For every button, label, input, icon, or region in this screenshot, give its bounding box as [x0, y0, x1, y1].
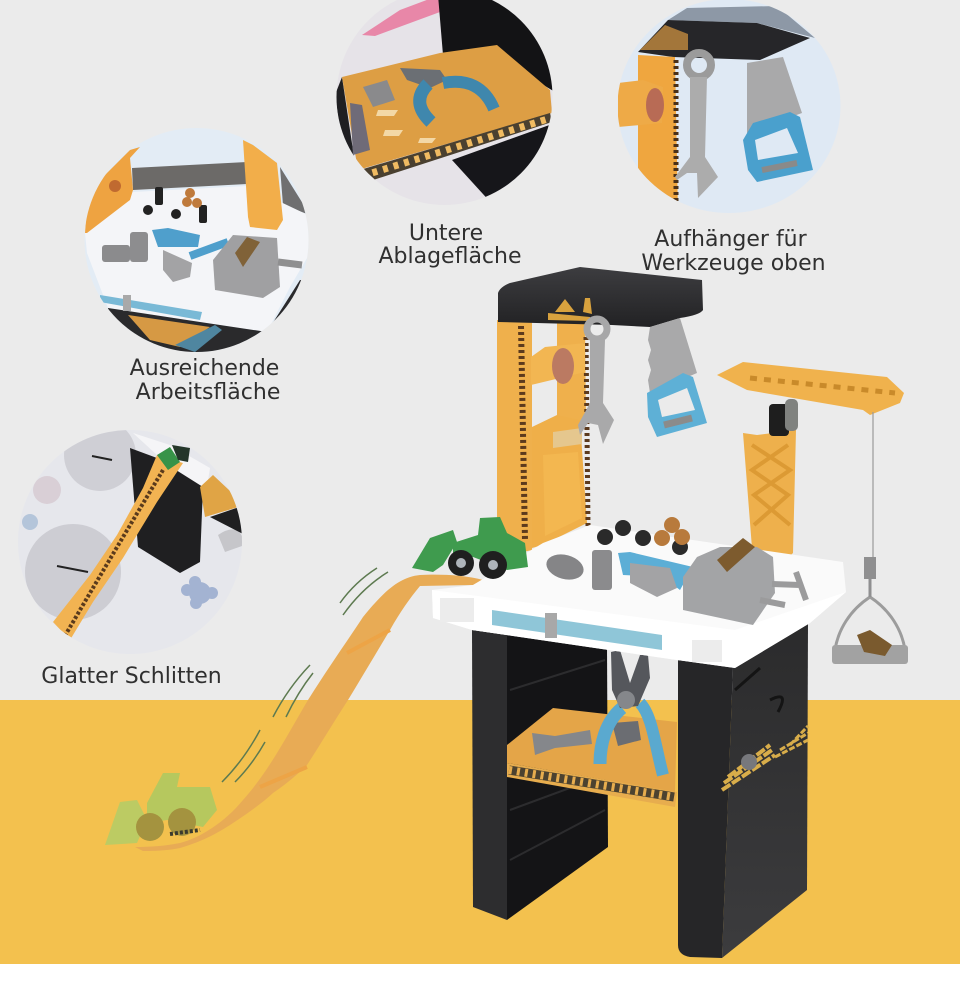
circle: tool hangers [615, 0, 843, 220]
label: Glatter Schlitten: Glatter Schlitten [41, 664, 222, 689]
label: Ausreichende Arbeitsfläche [130, 356, 280, 405]
lower shelf [507, 650, 677, 807]
pulley [769, 399, 798, 436]
label: Aufhänger für Werkzeuge oben [641, 227, 826, 276]
label: Ausreichende Arbeitsfläche: Ausreichende [130, 356, 279, 381]
label: Aufhänger für Werkzeuge oben: Aufhänger für [654, 227, 808, 252]
pliers [600, 650, 663, 775]
circle: work surface [84, 125, 312, 355]
background wall [0, 0, 960, 700]
workbench [412, 267, 908, 958]
hanging wrench [578, 319, 614, 444]
label: Untere Ablagefläche: Untere [409, 221, 483, 246]
roof [498, 267, 703, 327]
motion lines [222, 568, 388, 782]
ramp [135, 575, 483, 851]
bracket with badge [531, 343, 585, 385]
label: Aufhänger für Werkzeuge oben: Werkzeuge oben [641, 251, 826, 276]
table top [432, 525, 846, 668]
background floor [0, 700, 960, 964]
bench legs [472, 623, 808, 958]
crane [717, 362, 908, 664]
label: Untere Ablagefläche [378, 221, 522, 269]
label: Ausreichende Arbeitsfläche: Arbeitsfläche [136, 380, 280, 405]
circle: slide [22, 430, 242, 638]
circle: lower shelf [335, 0, 555, 208]
toy bulldozer [412, 517, 528, 579]
tools on table [544, 517, 806, 625]
label: Untere Ablagefläche: Ablagefläche [378, 244, 522, 269]
hanging saw [647, 318, 707, 437]
faded bulldozer [105, 773, 217, 845]
upright tower [497, 267, 703, 558]
